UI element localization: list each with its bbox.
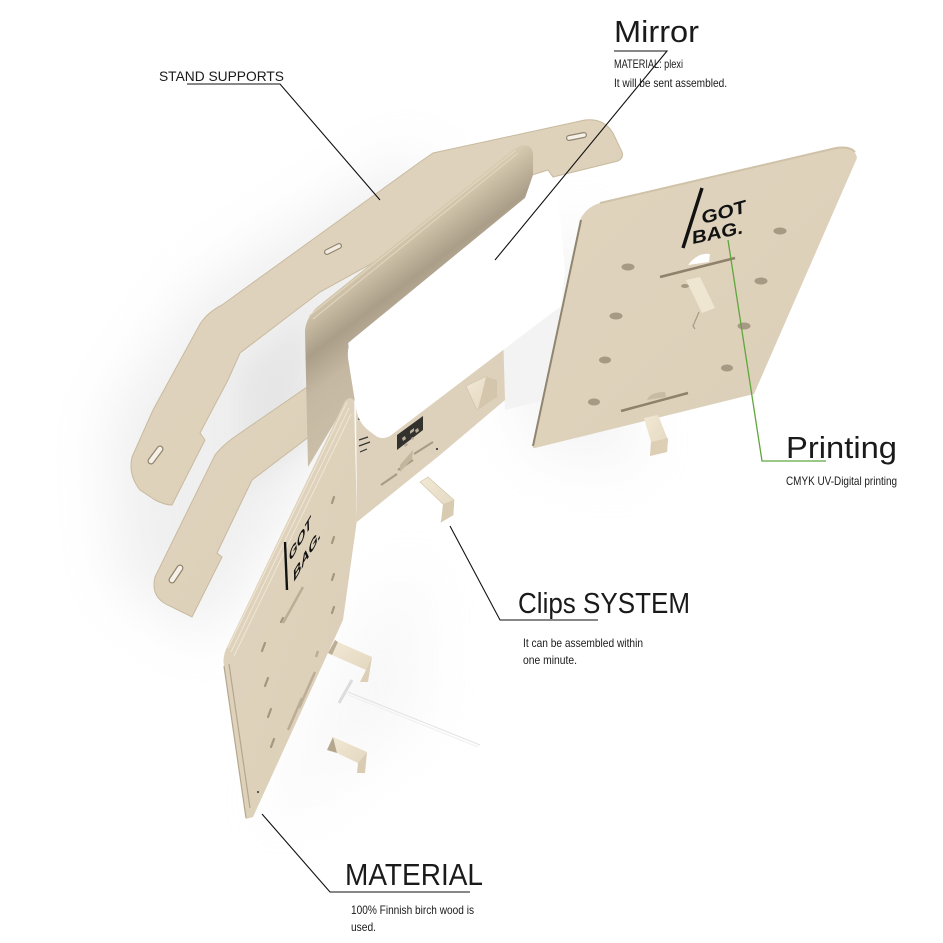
- heading: mirror: Mirror: [614, 14, 699, 49]
- logo: right panel: BAG.: [690, 218, 745, 248]
- heading: printing: Printing: [786, 430, 897, 465]
- leader line: printing: [728, 240, 826, 461]
- slot: lower support: [172, 568, 180, 580]
- cutout arch: [688, 254, 710, 265]
- top slot: [660, 258, 735, 277]
- text: material details second line: used.: [351, 920, 376, 934]
- text: mirror details: MATERIAL: plexi: [614, 57, 683, 71]
- rear clip: [466, 376, 497, 410]
- tab in slot: [400, 450, 413, 472]
- logo: left panel: [285, 511, 322, 590]
- callout: stand supports: [159, 68, 380, 200]
- slot: upper support middle: [327, 246, 339, 252]
- callout: mirror: [495, 14, 699, 260]
- text: printing details: CMYK UV-Digital printing: [786, 474, 897, 488]
- leader line: clips system: [450, 526, 598, 620]
- QR code: [397, 416, 423, 450]
- stand support: lower: [154, 385, 310, 617]
- panel slots: [283, 587, 318, 730]
- panel edge layers: [228, 402, 351, 656]
- logo: right panel: GOT: [699, 196, 751, 228]
- leader line: stand supports: [187, 84, 380, 200]
- text: clips details second line: one minute.: [523, 653, 577, 667]
- stand support: upper: [131, 120, 622, 505]
- panel back frame: [305, 145, 533, 467]
- callout: material: [262, 814, 483, 917]
- clear acrylic rod: [339, 680, 480, 747]
- mirror: [348, 183, 565, 438]
- text: clips details: It can be assembled within: [523, 636, 643, 650]
- callout: stand supports: STAND SUPPORTS: [159, 68, 284, 84]
- logo: right panel: [683, 188, 751, 248]
- logo: left panel: GOT: [288, 511, 314, 565]
- panel slots: [381, 442, 433, 485]
- logo: left panel: BAG.: [292, 525, 322, 585]
- callout: clips system: [450, 526, 690, 650]
- center wood panel: [305, 145, 533, 522]
- leader line: mirror: [495, 51, 667, 260]
- text: material details: 100% Finnish birch wood is: [351, 903, 474, 917]
- top clip: [686, 277, 715, 329]
- heading: clips system: Clips SYSTEM: [518, 588, 690, 620]
- panel front below mirror: [356, 330, 505, 522]
- right back panel: [533, 147, 857, 448]
- small screw: [257, 791, 259, 793]
- left front panel: [224, 398, 357, 819]
- loose clip center: [420, 477, 454, 522]
- leader line: material: [262, 814, 470, 892]
- panel edge layers: [309, 150, 518, 319]
- soft floor shadows: [110, 150, 640, 830]
- panel holes: [262, 497, 334, 747]
- bottom slot and arch: [621, 393, 688, 411]
- small print: [359, 400, 370, 452]
- loose clip lower left: [327, 737, 367, 773]
- dot: [436, 448, 438, 450]
- slot: upper support left: [151, 449, 160, 461]
- callout: printing: [728, 240, 897, 488]
- loose clip upper left: [328, 640, 372, 682]
- heading: material: MATERIAL: [345, 857, 483, 892]
- text: mirror assembly note: It will be sent assembled.: [614, 76, 727, 90]
- bottom clip right panel: [644, 415, 668, 456]
- slot: upper support right: [569, 135, 584, 138]
- gap behind mirror: [502, 310, 560, 410]
- panel holes: [588, 228, 786, 406]
